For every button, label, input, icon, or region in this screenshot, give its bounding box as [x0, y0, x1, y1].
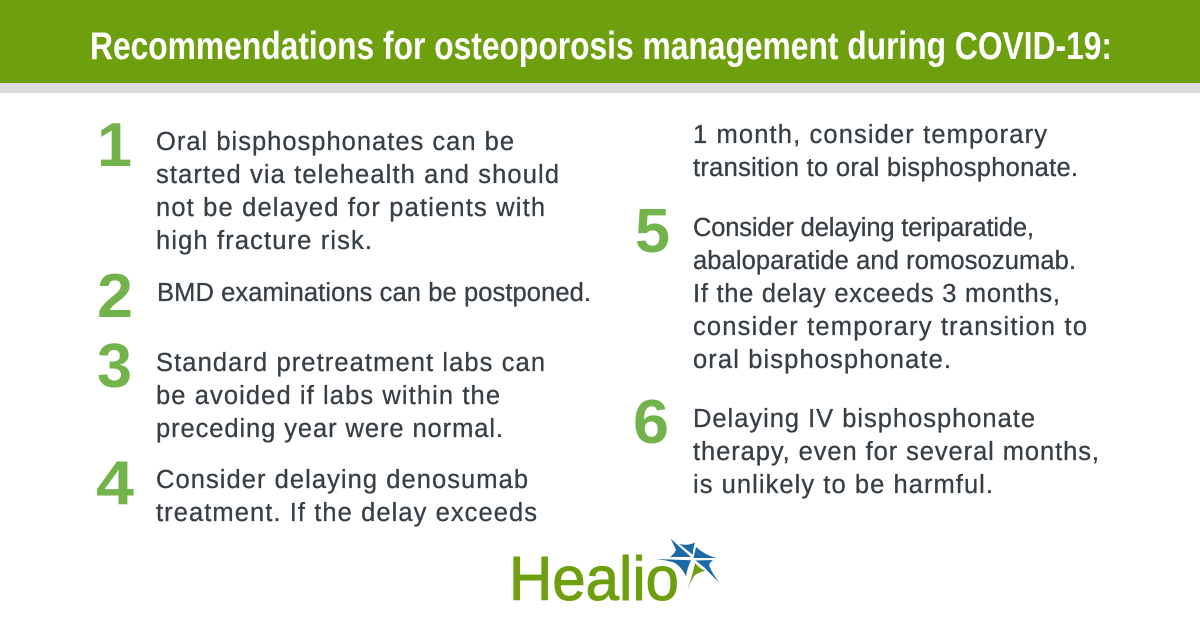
recommendation 4: 4 [96, 449, 135, 518]
header band [0, 0, 1200, 93]
recommendation 2 [97, 262, 591, 331]
recommendation 6: Delaying IV bisphosphonate [693, 405, 1035, 433]
recommendation 3 [97, 332, 545, 443]
recommendation 5: abaloparatide and romosozumab. [693, 247, 1076, 275]
recommendation 5: oral bisphosphonate. [693, 346, 951, 374]
recommendation 1: 1 [97, 111, 132, 180]
recommendation 6: 6 [633, 388, 669, 457]
recommendation 5: Consider delaying teriparatide, [693, 214, 1034, 242]
recommendation 4: Consider delaying denosumab [156, 466, 528, 494]
recommendation 1 [97, 111, 559, 255]
recommendation 4 continued: transition to oral bisphosphonate. [693, 154, 1078, 182]
recommendation 6: therapy, even for several months, [693, 438, 1099, 466]
recommendation 1: high fracture risk. [156, 227, 372, 255]
recommendation 2: BMD examinations can be postponed. [157, 279, 591, 307]
recommendation 5: If the delay exceeds 3 months, [693, 280, 1060, 308]
recommendation 1: Oral bisphosphonates can be [156, 128, 514, 156]
recommendation 4 continued [693, 121, 1078, 182]
recommendation 3: preceding year were normal. [156, 415, 503, 443]
Healio logo: Healio [509, 545, 679, 614]
icon: star [656, 539, 720, 591]
recommendation 2: 2 [97, 262, 133, 331]
recommendation 3: 3 [97, 332, 132, 401]
recommendation 6: is unlikely to be harmful. [693, 471, 993, 499]
recommendation 5 [635, 197, 1087, 374]
recommendation 5: 5 [635, 197, 670, 266]
recommendation 5: consider temporary transition to [693, 313, 1087, 341]
recommendation 3: Standard pretreatment labs can [156, 349, 545, 377]
recommendation 1: not be delayed for patients with [156, 194, 545, 222]
recommendation 3: be avoided if labs within the [156, 382, 500, 410]
recommendation 4: treatment. If the delay exceeds [156, 499, 537, 527]
recommendation 4 continued: 1 month, consider temporary [693, 121, 1047, 149]
recommendation 6 [633, 388, 1099, 499]
recommendation 4 [96, 449, 537, 527]
recommendation 1: started via telehealth and should [156, 161, 559, 189]
